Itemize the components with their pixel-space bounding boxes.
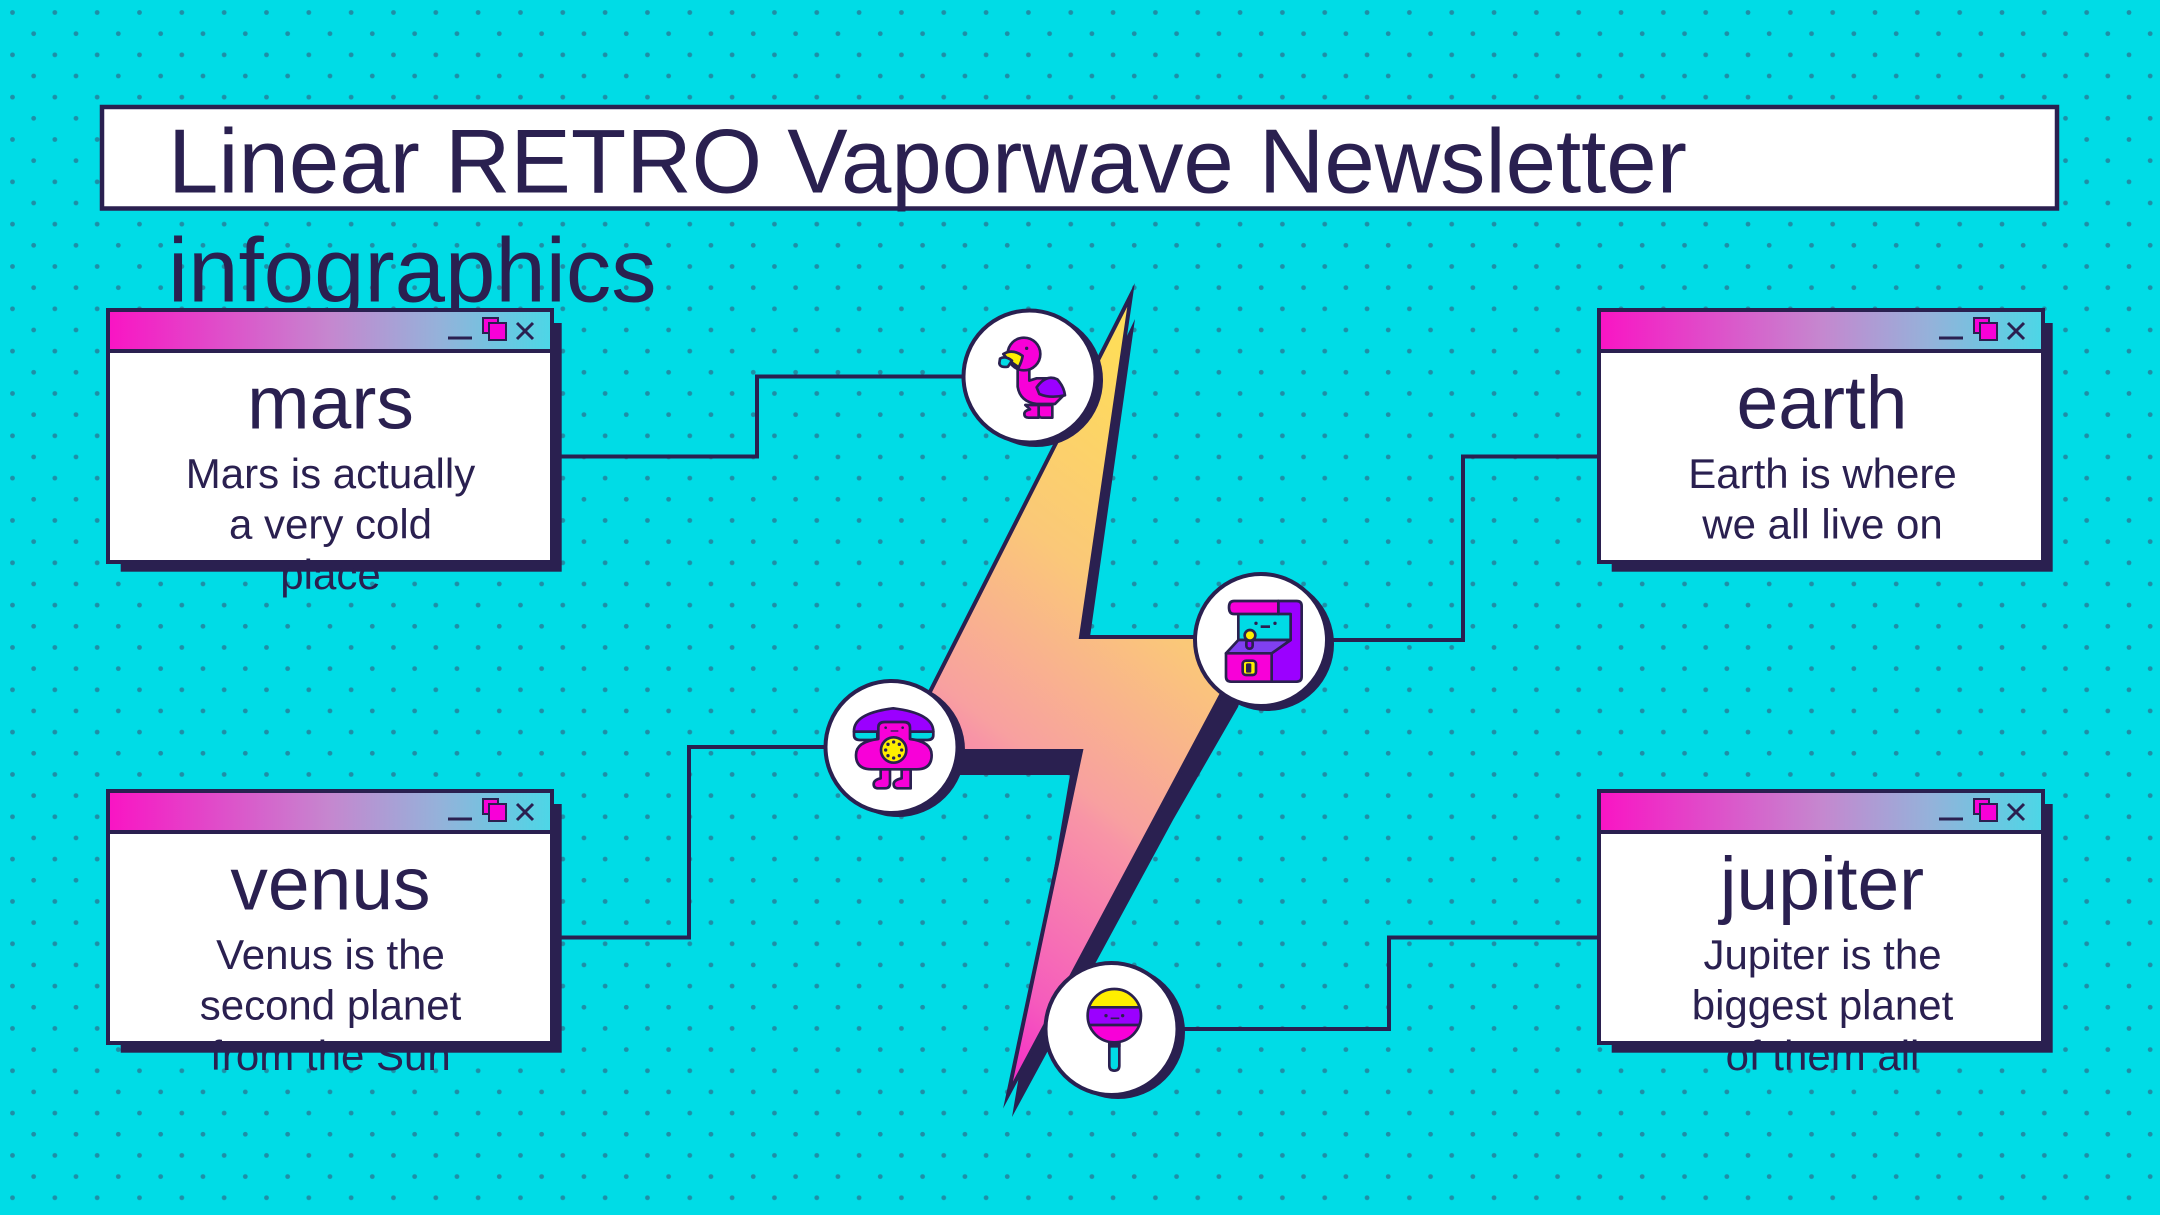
description: jupiter: Jupiter is the: [1703, 931, 1942, 978]
icon: flamingo: [999, 338, 1065, 418]
description: venus: [200, 931, 462, 1079]
connector: venus: [558, 747, 828, 938]
description: venus: from the Sun: [210, 1032, 451, 1079]
description: venus: Venus is the: [216, 931, 445, 978]
panel: earth: [1599, 310, 2053, 572]
panel: mars: [108, 310, 562, 598]
description: jupiter: [1692, 931, 1954, 1079]
panel: venus: [108, 791, 562, 1079]
description: jupiter: biggest planet: [1692, 982, 1954, 1028]
heading: jupiter: jupiter: [1718, 842, 1924, 926]
window title bar: [1601, 793, 2041, 832]
icon: lollipop: [1087, 988, 1143, 1071]
node: lollipop: [1046, 963, 1185, 1099]
window title bar: [1601, 312, 2041, 351]
title banner: [102, 107, 2057, 322]
connector: jupiter: [1176, 938, 1600, 1029]
connector: mars: [558, 376, 965, 456]
panel: jupiter: [1599, 791, 2053, 1079]
node: arcade cabinet: [1195, 574, 1334, 711]
node: flamingo: [964, 310, 1103, 447]
heading: mars: mars: [247, 360, 414, 444]
window title bar: [110, 312, 550, 351]
description: mars: a very cold: [229, 500, 432, 548]
heading: earth: earth: [1737, 360, 1907, 444]
icon: telephone: [854, 708, 933, 788]
title text: infographics: [168, 220, 656, 322]
lightning bolt: [900, 295, 1262, 1117]
description: jupiter: of them all: [1726, 1032, 1919, 1079]
icon: arcade cabinet: [1226, 601, 1302, 682]
description: earth: Earth is where: [1688, 450, 1957, 497]
window title bar: [110, 793, 550, 832]
title text: [168, 112, 1687, 322]
description: earth: we all live on: [1701, 500, 1943, 548]
description: earth: [1688, 450, 1957, 548]
description: mars: Mars is actually: [186, 450, 475, 497]
description: mars: place: [280, 551, 381, 598]
connector: earth: [1325, 456, 1600, 640]
node: telephone: [826, 681, 965, 817]
description: mars: [186, 450, 475, 598]
heading: venus: venus: [230, 842, 431, 926]
description: venus: second planet: [200, 982, 462, 1028]
title text: Linear RETRO Vaporwave Newsletter: [168, 112, 1687, 212]
